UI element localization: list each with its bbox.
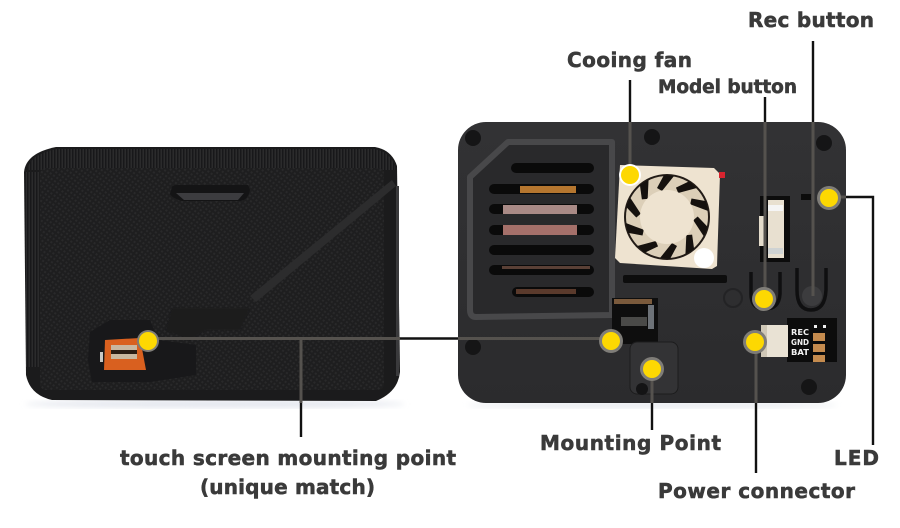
slot bbox=[170, 185, 250, 201]
label: Cooing fan: Cooing fan bbox=[567, 48, 692, 72]
label: Mounting Point: Mounting Point bbox=[540, 431, 721, 455]
power symbol bbox=[724, 289, 742, 307]
marker dots bbox=[137, 164, 841, 381]
label: touch screen mounting point: touch screen mounting point bbox=[120, 446, 456, 470]
camera connector bbox=[612, 298, 658, 344]
label: Power connector: Power connector bbox=[658, 479, 855, 503]
power connector and pad board: BAT bbox=[791, 348, 810, 357]
connector block bbox=[88, 320, 196, 382]
vent slots bbox=[489, 163, 594, 297]
label: Model button: Model button bbox=[658, 77, 797, 98]
model button slot bbox=[751, 272, 780, 309]
power connector and pad board: GND bbox=[791, 338, 809, 347]
switch bbox=[759, 196, 790, 262]
panel: device rear bbox=[458, 122, 846, 408]
red wire bbox=[719, 172, 725, 178]
diagonal rib bbox=[250, 180, 396, 302]
vent frame bbox=[470, 142, 612, 317]
power connector and pad board bbox=[761, 318, 837, 362]
board labels: REC bbox=[791, 328, 809, 337]
orange connector bbox=[104, 338, 146, 370]
icon: cooling fan bbox=[615, 165, 720, 269]
label: unique match: (unique match) bbox=[200, 475, 375, 499]
mounting block bbox=[630, 342, 678, 395]
label: Rec button: Rec button bbox=[748, 8, 874, 32]
LED window bbox=[801, 194, 811, 200]
leader lines bbox=[148, 41, 873, 473]
rec button slot bbox=[797, 268, 826, 310]
lower slot bbox=[623, 275, 727, 283]
screws bbox=[465, 129, 832, 395]
label: LED: LED bbox=[834, 446, 879, 470]
panel: touch screen case rear bbox=[24, 147, 405, 408]
